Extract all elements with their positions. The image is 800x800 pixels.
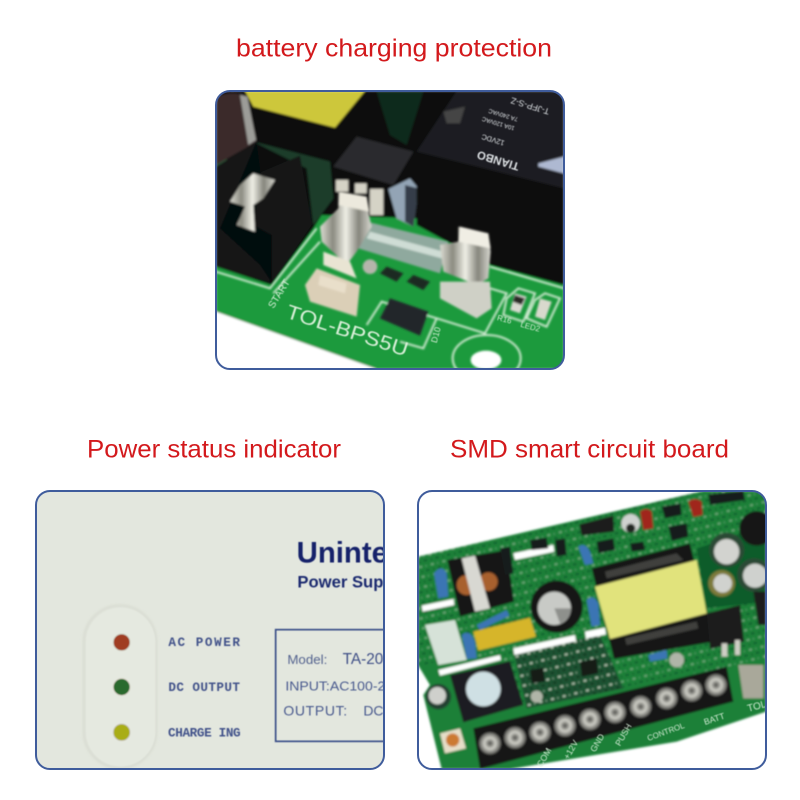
terminal labels: PUSH xyxy=(613,722,634,748)
board silkscreen text: R16 xyxy=(496,313,513,326)
board silkscreen text: D10 xyxy=(429,326,443,344)
led: dc output: DC OUTPUT xyxy=(168,680,240,695)
model plate: TA-20 xyxy=(343,651,383,668)
transformer xyxy=(592,543,714,659)
small capacitor xyxy=(388,178,418,227)
brand text: Power Sup xyxy=(297,573,383,592)
main capacitor xyxy=(531,581,583,633)
title: battery charging protection: battery charging protection xyxy=(236,34,552,62)
common-mode choke xyxy=(447,550,514,617)
panel: power status indicator photo xyxy=(36,491,409,769)
silkscreen lines xyxy=(216,228,564,382)
relay markings: T-JFP-S-Z xyxy=(509,95,551,117)
mounting hole xyxy=(471,351,501,369)
terminal blocks xyxy=(473,667,733,769)
board silkscreen text xyxy=(267,278,542,361)
relay xyxy=(417,91,564,188)
smd diode xyxy=(380,298,428,336)
panel: fuse close-up photo xyxy=(216,91,564,382)
terminal labels: COM xyxy=(535,746,553,769)
relay markings: 10A 120VAC xyxy=(481,115,516,130)
led pads xyxy=(510,293,527,313)
led: dc output xyxy=(113,679,240,695)
board silkscreen text: LED2 xyxy=(519,320,542,334)
yellow capacitor xyxy=(473,618,536,651)
terminal labels xyxy=(535,699,768,769)
white connector xyxy=(425,620,467,665)
connector at right xyxy=(738,665,763,698)
led: ac power: AC POWER xyxy=(168,635,240,650)
relay markings xyxy=(476,95,551,172)
small electrolytic xyxy=(621,514,640,533)
board silkscreen text: START xyxy=(267,278,293,311)
model plate: INPUT:AC100-2 xyxy=(285,680,385,694)
terminal labels: BATT xyxy=(703,711,727,727)
slots xyxy=(422,545,606,676)
led: charging xyxy=(113,724,241,741)
board silkscreen text: TOL-BPS5U xyxy=(283,301,411,361)
model plate: Model: xyxy=(287,652,327,667)
relay markings: TIANBO xyxy=(476,148,521,172)
pcb board xyxy=(418,491,766,769)
led: ac power xyxy=(113,634,240,651)
capacitor xyxy=(216,93,257,165)
terminal labels: CONTROL xyxy=(646,721,686,743)
title: smd smart circuit board: SMD smart circuit board xyxy=(450,436,729,464)
terminal block xyxy=(216,141,312,282)
terminal labels: GND xyxy=(588,732,606,754)
relay markings: 12VDC xyxy=(480,132,506,148)
tactile button xyxy=(305,268,360,317)
small capacitor xyxy=(426,684,451,709)
model plate: DC xyxy=(363,703,384,719)
brand text: Uninte xyxy=(297,537,388,570)
fuse clips xyxy=(320,192,372,265)
relay xyxy=(450,661,523,722)
yellow transformer xyxy=(245,91,365,128)
indicator recess xyxy=(84,606,156,768)
orange button xyxy=(440,728,466,753)
relay markings: 7A 240VAC xyxy=(487,107,519,121)
led: charging: CHARGE ING xyxy=(168,725,241,740)
smd components xyxy=(530,658,598,683)
title: power status indicator: Power status indicator xyxy=(87,436,341,464)
fuse glass xyxy=(358,222,448,273)
model plate xyxy=(274,628,383,743)
terminal labels: +12V xyxy=(561,738,580,761)
brand text xyxy=(297,537,388,592)
regulator xyxy=(333,137,413,185)
ics near top xyxy=(579,516,614,536)
panel: circuit board photo xyxy=(418,491,774,769)
smd transistors xyxy=(380,267,403,282)
output capacitors xyxy=(738,510,765,546)
blue capacitors xyxy=(434,568,448,598)
model plate: OUTPUT: xyxy=(283,703,348,719)
power regulator xyxy=(707,605,744,649)
pcb board xyxy=(216,215,564,369)
terminal labels: TOL xyxy=(746,699,768,715)
red capacitors xyxy=(640,509,653,530)
